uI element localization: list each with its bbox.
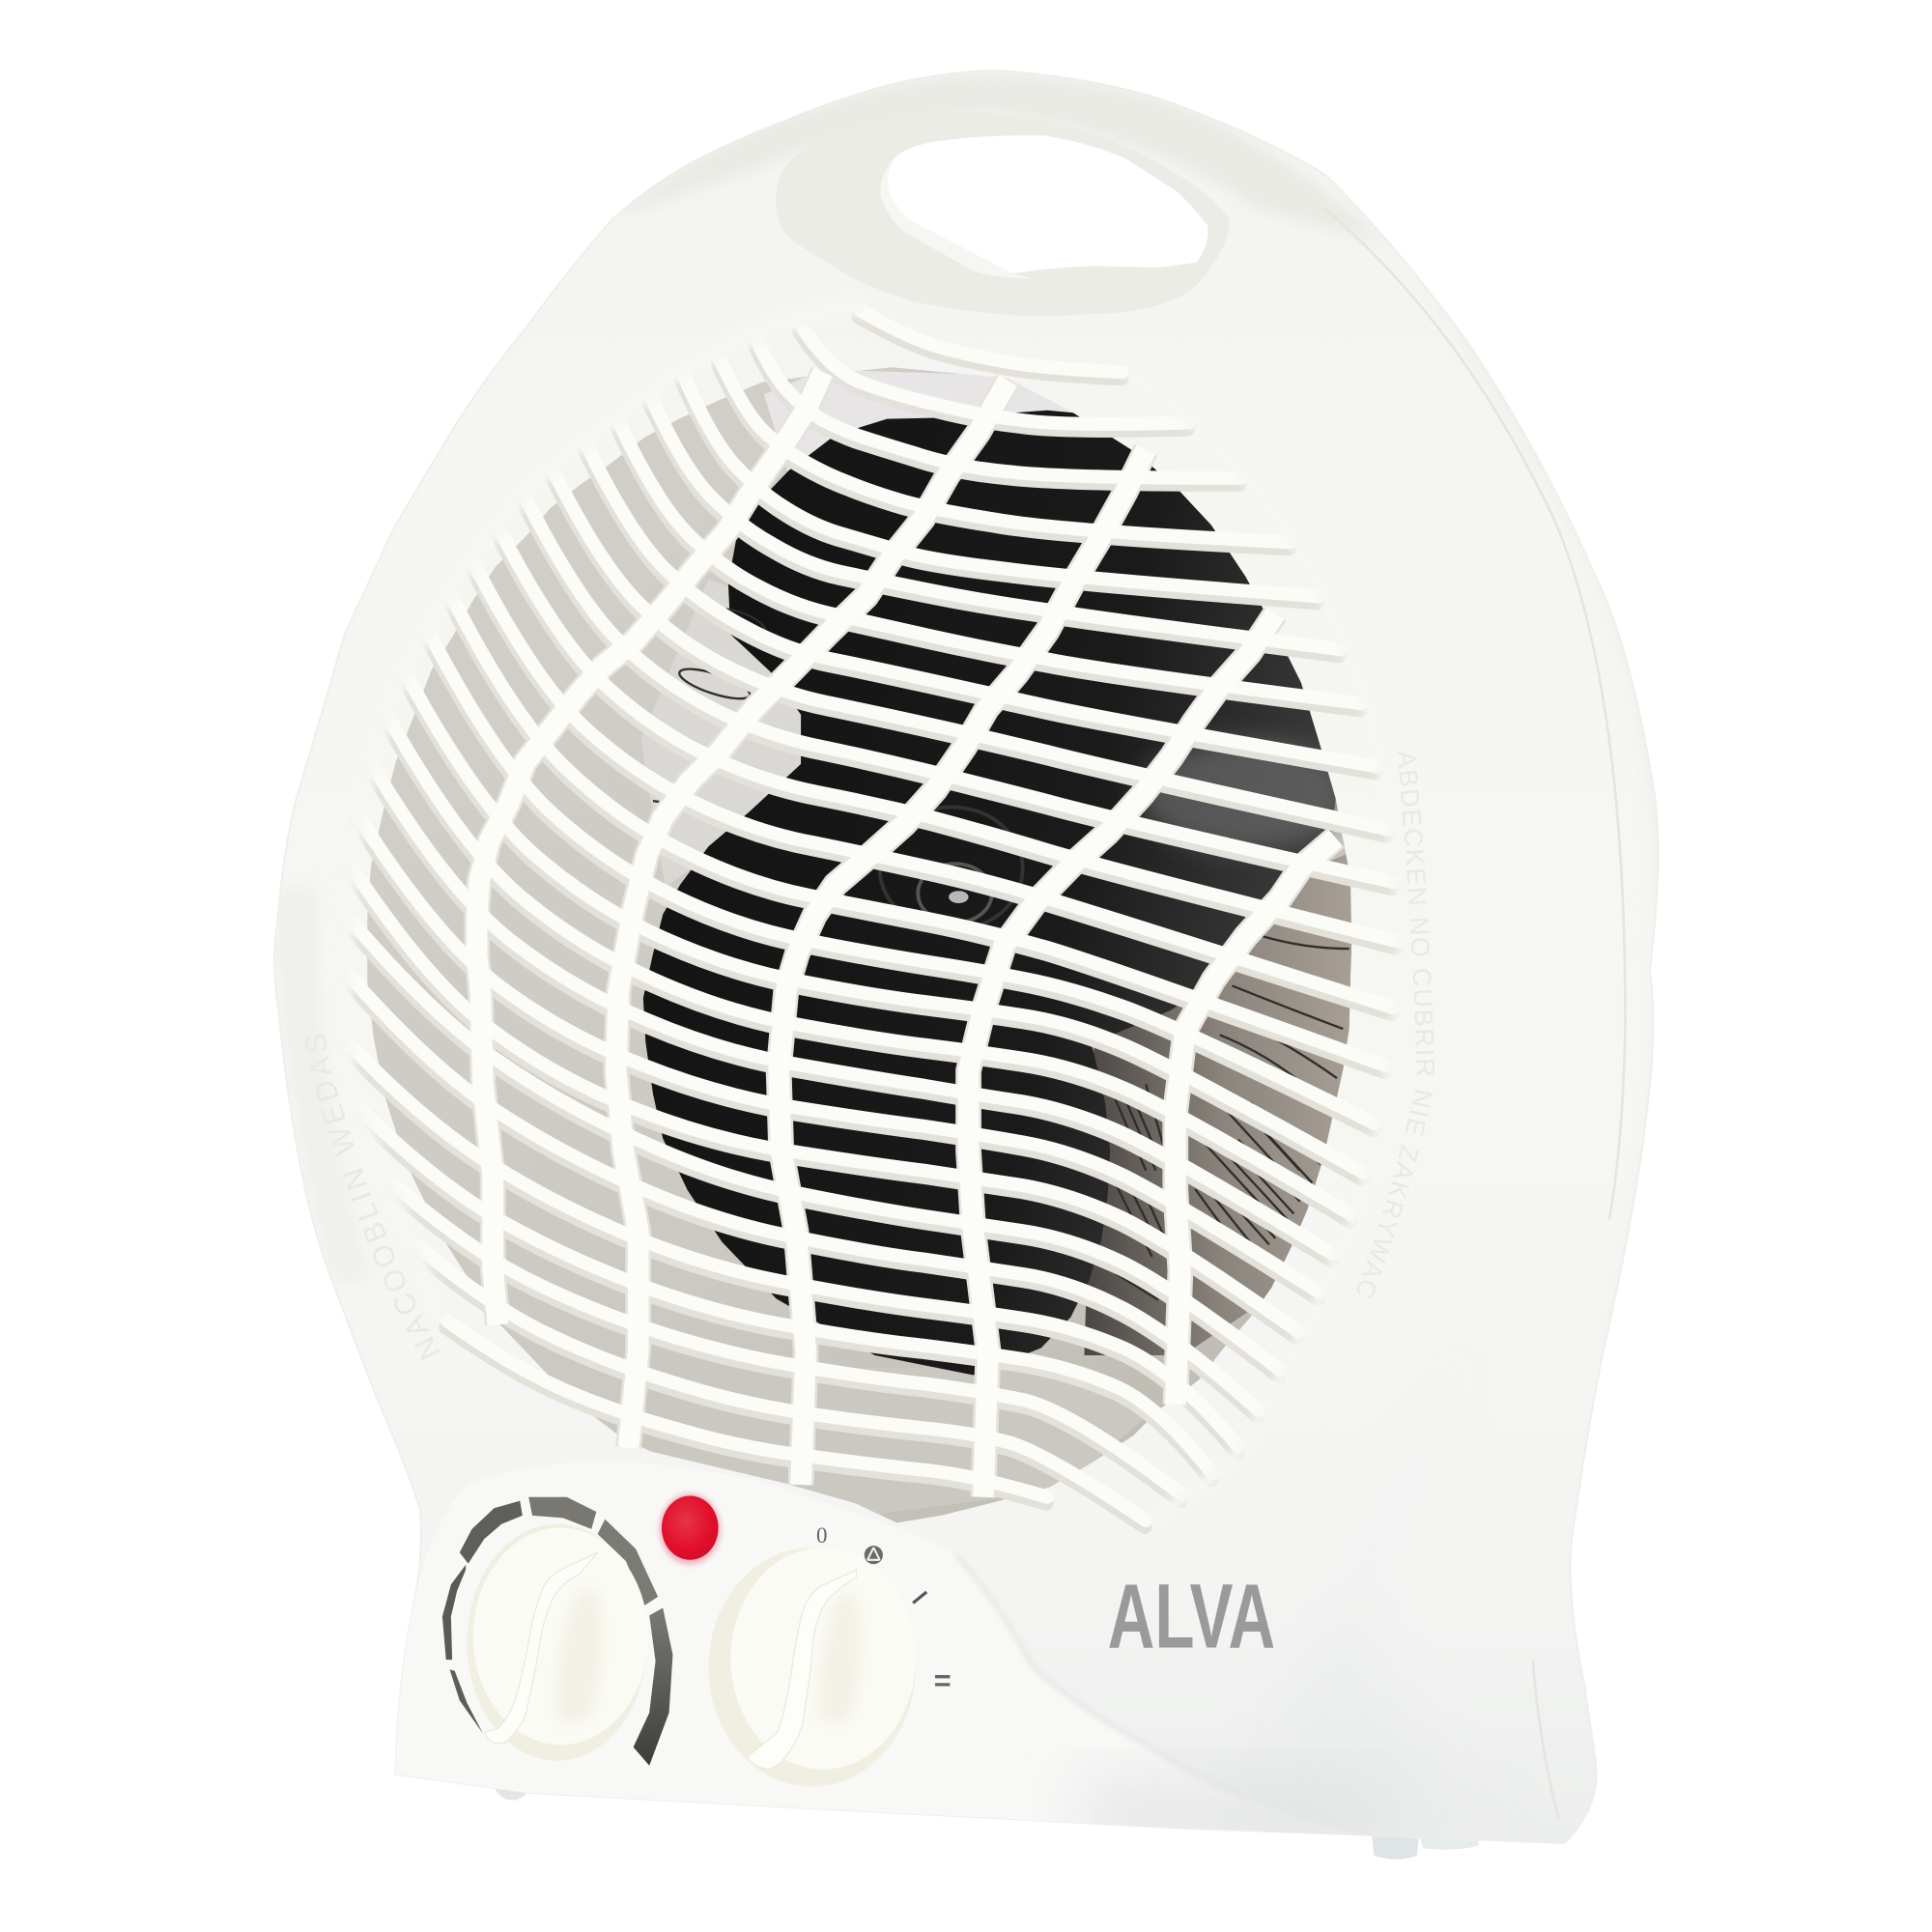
left dial <box>442 1497 672 1766</box>
handle inner wall <box>880 156 1033 278</box>
knob recess <box>467 1524 647 1761</box>
motor hub <box>880 807 1023 930</box>
body shading <box>276 74 1725 1355</box>
dial scale segments <box>442 1497 672 1766</box>
body seam lines <box>1325 210 1625 1819</box>
grille ribs <box>477 372 1336 1497</box>
right dial <box>708 1548 916 1786</box>
knob grip shadow <box>818 1595 862 1722</box>
red indicator light <box>659 1493 721 1565</box>
bar tips fading into the body: right <box>1128 372 1404 1520</box>
grille bars: shadow <box>345 317 1396 1526</box>
grille opening: interior <box>367 367 1368 1523</box>
switch label: II: = <box>934 1664 952 1697</box>
knob grip ridge <box>484 1552 598 1744</box>
foot: right <box>1372 1830 1419 1860</box>
lower interior: pale metal <box>641 1377 1144 1514</box>
switch label: I <box>913 1592 926 1603</box>
knob face <box>730 1548 916 1770</box>
foot: right rear <box>1419 1836 1479 1850</box>
embossed warning text: right: ABDECKEN NO CUBRIR NIE ZAKRYWAC <box>1357 752 1435 1298</box>
left coil reflection <box>640 579 801 887</box>
grey reflection on fan <box>1140 739 1350 850</box>
bar tips fading into the body: left <box>341 303 863 1321</box>
pale interior at top of grille <box>764 370 1084 474</box>
knob grip shadow <box>556 1589 603 1725</box>
product illustration: fan heater <box>273 70 1660 1860</box>
grille bars <box>346 310 1397 1520</box>
brand logo: ALVA: ALVA <box>1108 1566 1275 1667</box>
icon: fan mode <box>865 1546 883 1564</box>
switch label: 0: 0 <box>816 1523 827 1548</box>
lower right soft shadow <box>1088 1767 1371 1834</box>
knob face <box>473 1528 648 1745</box>
fan and motor: dark mass <box>643 411 1336 1375</box>
knob grip ridge <box>747 1570 856 1770</box>
grille ribs: shadow <box>477 372 1336 1497</box>
heating wires <box>653 604 1350 1300</box>
handle opening <box>888 135 1208 273</box>
handle recess <box>776 112 1230 316</box>
foot: left <box>492 1780 531 1801</box>
control panel <box>395 1461 1355 1834</box>
coil chamber: right side <box>1084 850 1368 1355</box>
panel swoosh line <box>956 1555 1248 1799</box>
embossed warning text: left: NACOOBLIN WEDAS <box>305 1035 440 1360</box>
heater body <box>274 71 1658 1843</box>
knob recess <box>708 1548 916 1786</box>
